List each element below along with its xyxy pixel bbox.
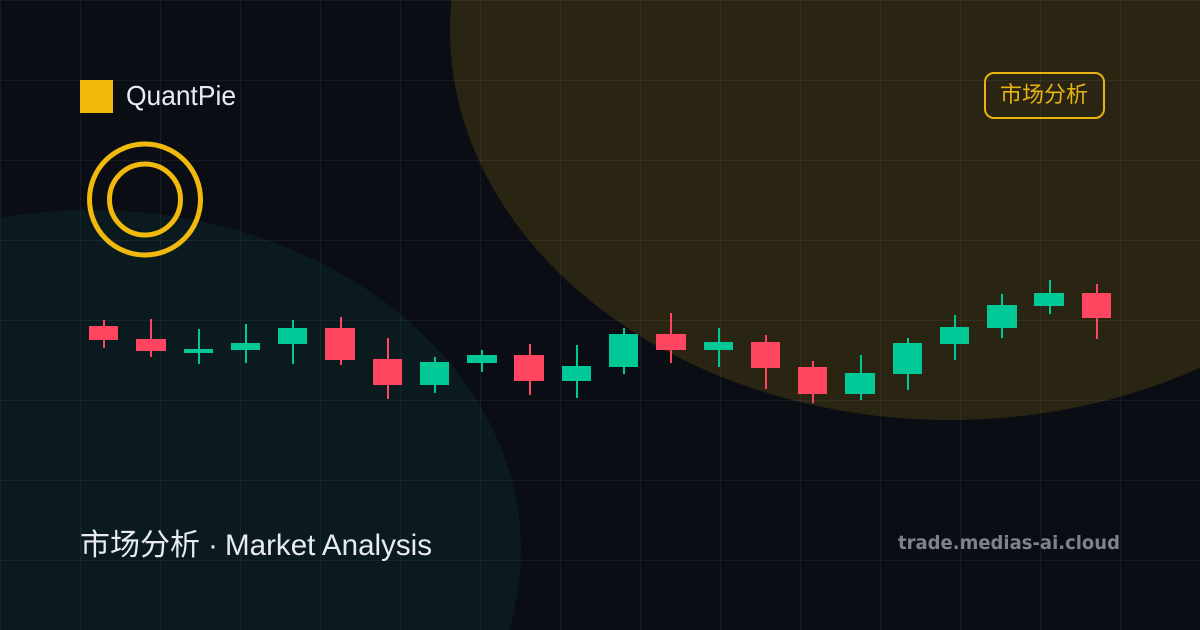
brand logo	[80, 80, 236, 113]
tag: market analysis: 市场分析	[1000, 82, 1088, 107]
tag: market analysis	[985, 73, 1104, 118]
brand name: QuantPie	[126, 80, 236, 111]
candlestick chart	[89, 280, 1111, 403]
icon: yellow square	[80, 80, 113, 113]
site url: trade.medias-ai.cloud	[898, 532, 1120, 554]
title: ·	[208, 529, 218, 562]
title: Market Analysis	[225, 529, 432, 562]
title: 市场分析	[80, 529, 200, 562]
title	[80, 529, 432, 562]
background blob: teal	[0, 210, 521, 630]
background blob: yellow	[450, 0, 1200, 420]
icon: concentric rings	[90, 144, 200, 255]
